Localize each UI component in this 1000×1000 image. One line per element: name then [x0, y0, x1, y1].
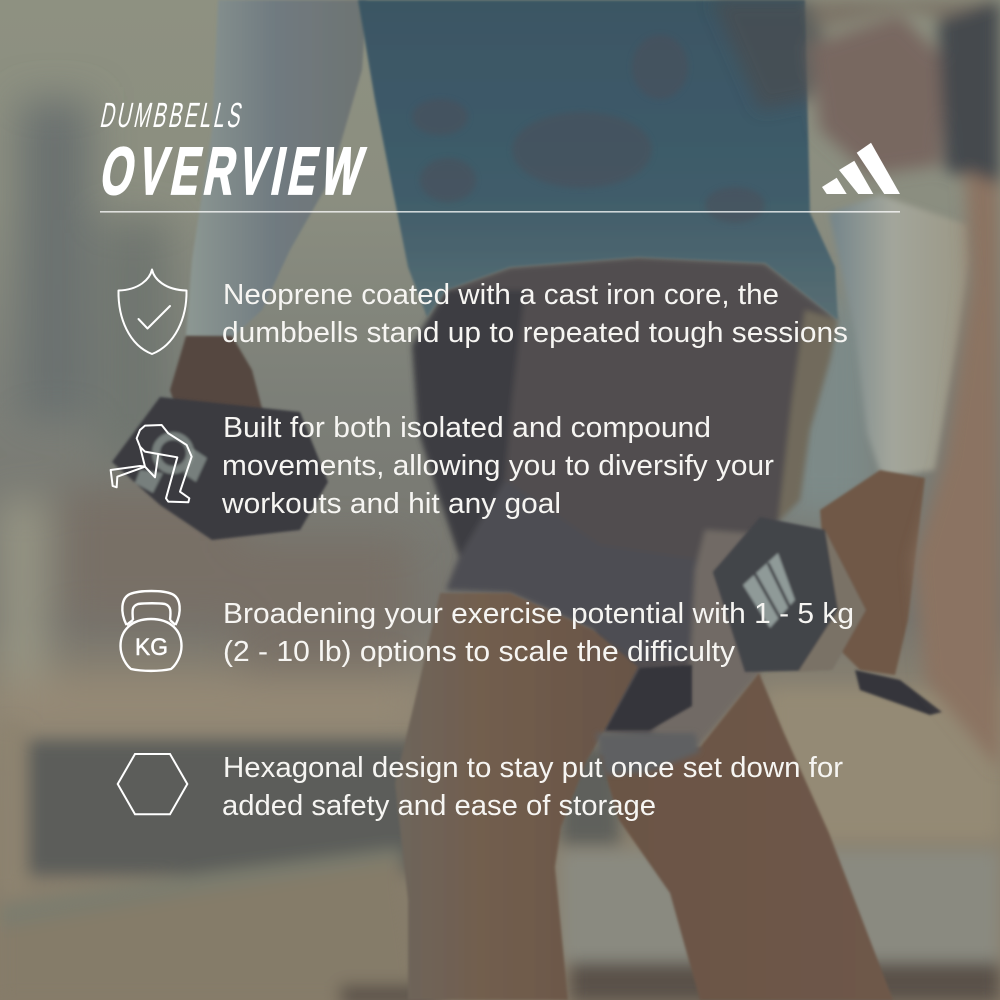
- text: built for both: Built for both isolated and compound: [223, 412, 711, 444]
- shirt: [358, 0, 838, 320]
- legs: [395, 593, 638, 1000]
- foreground blurred dumbbell and arm: [712, 0, 1000, 770]
- text: hexagonal design: added safety and ease of storage: [222, 790, 656, 822]
- text: broadening: [223, 598, 854, 668]
- text: neoprene coated: dumbbells stand up to repeated tough sessions: [222, 317, 848, 349]
- right dumbbell: [713, 517, 942, 715]
- text: hexagonal design: Hexagonal design to stay put once set down for: [223, 752, 844, 784]
- icon: adidas logo: [822, 143, 900, 194]
- icon: hexagon: [118, 754, 187, 814]
- icon: shield with check: [118, 270, 187, 354]
- text: built for both: workouts and hit any goal: [221, 488, 561, 520]
- right sleeve: [829, 195, 970, 478]
- text: built for both: [221, 412, 775, 520]
- text: neoprene coated: [222, 279, 848, 349]
- text: neoprene coated: Neoprene coated with a cast iron core, the: [223, 279, 779, 311]
- heading: DUMBBELLS: DUMBBELLS: [97, 97, 245, 135]
- text: built for both: movements, allowing you to diversify your: [222, 450, 775, 482]
- shorts: [412, 257, 838, 745]
- icon: kettlebell KG: [120, 591, 182, 671]
- text: broadening: Broadening your exercise potential with 1 - 5 kg: [223, 598, 854, 630]
- icon: kettlebell KG: KG: [135, 634, 168, 661]
- heading: OVERVIEW: OVERVIEW: [95, 134, 370, 208]
- right hand: [820, 470, 925, 675]
- left sleeve: [186, 0, 367, 338]
- text: hexagonal design: [222, 752, 844, 822]
- shirt pattern: [412, 35, 765, 223]
- left hand: [170, 336, 265, 470]
- header divider: [100, 211, 900, 213]
- icon: lunge exercise figure: [111, 425, 192, 502]
- left dumbbell: [112, 397, 328, 540]
- text: broadening: (2 - 10 lb) options to scale the difficulty: [223, 636, 736, 668]
